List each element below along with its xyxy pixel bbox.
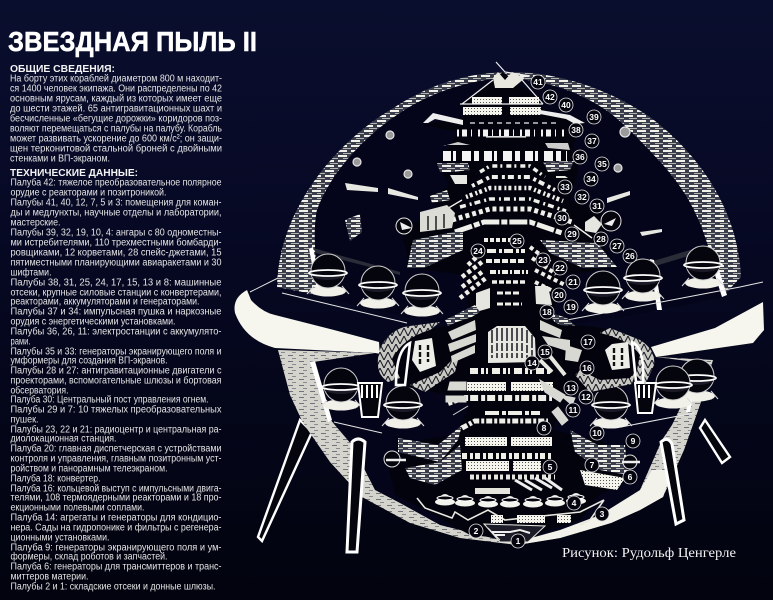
text block: general information [10, 64, 222, 164]
text block: technical data: ровщиками, 12 корветами, 28 спейс-джетами, 15 [10, 248, 222, 258]
numbered deck labels: 1 [516, 536, 521, 546]
numbered deck labels: 9 [631, 436, 636, 446]
hull inner rib left [310, 361, 332, 422]
side cluster right [585, 216, 602, 233]
text block: general information: стенками и ВП-экраном. [10, 154, 110, 164]
deck chevrons [440, 166, 592, 238]
text block: technical data: Палуба 18: конвертер. [10, 472, 100, 484]
icon: outer landing legs [258, 420, 730, 541]
text block: technical data: телями, 108 термоядерными реакторами и 18 про- [10, 492, 222, 504]
side details [345, 183, 662, 241]
central core: upper stack [396, 62, 625, 330]
numbered deck labels: 14 [527, 358, 537, 368]
text block: general information: может развивать ускорение до 600 км/с²; он защи- [10, 134, 222, 144]
text block: technical data: орудия с энергетическими установками. [10, 316, 176, 328]
text block: technical data: Палубы 38, 31, 25, 24, 17, 15, 13 и 8: машинные [10, 276, 222, 288]
small side pods [353, 127, 630, 178]
hangar panels [309, 245, 727, 310]
text block: technical data: ройством и панорамным телеэкраном. [10, 464, 168, 474]
text block: technical data: мастерские. [10, 218, 60, 228]
text block: technical data: Палубы 35 и 33: генераторы экранирующего поля и [10, 346, 222, 358]
hub lattice left [378, 322, 440, 382]
upper dome hull band [277, 72, 741, 287]
text block: technical data: Палуба 42: тяжелое преобразовательное полярное [10, 176, 222, 188]
text block: technical data: Палуба 6: генераторы для трансмиттеров и транс- [10, 560, 222, 572]
text block: technical data: Палуба 14: агрегаты и генераторы для кондицио- [10, 512, 222, 524]
text block: technical data: шифтами. [10, 266, 52, 278]
numbered deck labels: 26 [625, 251, 635, 261]
numbered deck labels: 11 [568, 405, 578, 415]
text block: general information: основным ярусам, каждый из которых имеет еще [10, 94, 222, 104]
numbered deck labels: 33 [560, 182, 570, 192]
text block: technical data: Палубы 41, 40, 12, 7, 5 и 3: помещения для коман- [10, 196, 222, 208]
text block: general information: ся 1400 человек экипажа. Они распределены по 42 [10, 84, 222, 94]
text block: general information: воляют перемещаться с палубы на палубу. Корабль [10, 122, 222, 134]
hub lattice right [600, 328, 654, 385]
numbered deck labels: 28 [596, 234, 606, 244]
numbered deck labels: 25 [512, 236, 522, 246]
numbered deck labels: 30 [557, 213, 567, 223]
numbered deck labels: 2 [474, 526, 479, 536]
icon: inner landing legs [347, 439, 684, 552]
numbered deck labels: 6 [628, 472, 633, 482]
central core: hub [378, 313, 654, 542]
hangar zigzag floor [417, 498, 604, 525]
numbered deck labels: 18 [542, 307, 552, 317]
text block: technical data: контроля и управления, главным позитронным уст- [10, 454, 222, 464]
numbered deck labels: 19 [566, 302, 576, 312]
roof [460, 62, 543, 104]
numbered deck labels: 32 [577, 192, 587, 202]
numbered deck labels: 3 [600, 509, 605, 519]
text block: technical data: ми истребителями, 110 трехместными бомбарди- [10, 236, 222, 248]
window rows [457, 130, 565, 136]
numbered deck labels: 37 [587, 136, 597, 146]
numbered deck labels: 23 [538, 255, 548, 265]
text block: technical data: ды и медлунхты, научные отделы и лаборатории, [10, 206, 222, 218]
hangar bay saucers [435, 493, 586, 508]
core body [400, 72, 625, 320]
text block: technical data: формеры, склад роботов и запчастей. [10, 550, 168, 562]
dome interior [315, 78, 722, 328]
numbered deck labels: 7 [590, 460, 595, 470]
heading: technical data: ТЕХНИЧЕСКИЕ ДАННЫЕ: [10, 168, 138, 179]
text block: technical data: Палубы 29 и 7: 10 тяжелых преобразовательных [10, 404, 222, 416]
text block: general information: до шести этажей. 65 антигравитационных шахт и [10, 104, 222, 114]
numbered deck labels: 4 [572, 498, 577, 508]
numbered deck labels: 41 [533, 77, 543, 87]
ring band left [234, 290, 381, 372]
numbered deck labels: 29 [567, 229, 577, 239]
text block: technical data: Палуба 30: Центральный пост управления огнем. [10, 394, 208, 406]
numbered deck labels: 5 [548, 462, 553, 472]
text block: technical data: Палуба 20: главная диспетчерская с устройствами [10, 442, 222, 454]
text block: technical data: Палубы 2 и 1: складские отсеки и донные шлюзы. [10, 580, 216, 592]
side steps [446, 380, 575, 425]
lower band of dome sides [277, 243, 741, 297]
central reactor organ [488, 326, 536, 363]
numbered deck labels: 42 [545, 92, 555, 102]
hub side decks [448, 320, 476, 363]
ring lines [250, 278, 763, 323]
bottom airlock [484, 524, 545, 542]
numbered deck labels: 20 [554, 290, 564, 300]
numbered deck labels: 21 [568, 277, 578, 287]
side blocks [437, 163, 470, 172]
lower hull interior [313, 353, 696, 541]
text block: technical data: екционными полевыми соплами. [10, 502, 144, 514]
text block: technical data: Палубы 23, 22 и 21: радиоцентр и центральная ра- [10, 424, 222, 436]
upper wings [423, 110, 585, 125]
reactor pods [412, 338, 436, 372]
numbered deck labels: 13 [566, 383, 576, 393]
numbered deck labels: 35 [597, 159, 607, 169]
lower wings [407, 230, 463, 268]
text block: technical data: Палуба 9: генераторы экранирующего поля и ум- [10, 542, 222, 554]
numbered deck labels: 16 [582, 363, 592, 373]
spheres [307, 246, 724, 428]
numbered deck labels: 40 [561, 100, 571, 110]
lower hangar diagonals [515, 478, 562, 490]
numbered deck labels: 24 [473, 246, 483, 256]
text block: technical data: Палубы 37 и 34: импульсная пушка и наркозные [10, 306, 222, 318]
text block: technical data: проекторами, вспомогательные шлюзы и бортовая [10, 374, 222, 386]
illustration credit: Рисунок: Рудольф Ценгерле [562, 546, 736, 561]
hub body [382, 313, 652, 540]
text block: technical data: рами. [10, 336, 30, 348]
text block: technical data [10, 168, 222, 592]
ship cross-section illustration [234, 62, 764, 552]
text block: technical data: пушек. [10, 414, 38, 426]
text block: technical data: нера. Сады на гидропонике и фильтры с регенера- [10, 522, 222, 534]
lower ring lines [334, 413, 694, 433]
numbered deck labels: 34 [586, 174, 596, 184]
text block: technical data: пятиместными планирующими авиаракетами и 30 [10, 258, 222, 268]
lower stack rows [460, 240, 565, 304]
lower wings [398, 425, 462, 462]
numbered deck labels: 15 [540, 347, 550, 357]
icon: cannon boxes [358, 383, 656, 417]
text block: technical data: реакторами, аккумуляторами и генераторами. [10, 296, 200, 308]
text block: technical data: Палубы 36, 26, 11: электростанции с аккумулято- [10, 326, 222, 338]
heading: general information: ОБЩИЕ СВЕДЕНИЯ: [10, 64, 115, 75]
numbered deck labels: 31 [592, 201, 602, 211]
ring band right [651, 302, 764, 357]
lower hull [278, 350, 713, 545]
text block: technical data: Палубы 28 и 27: антигравитационные двигатели с [10, 364, 222, 376]
text block: technical data: обсерватория. [10, 384, 68, 396]
numbered deck labels: 38 [571, 125, 581, 135]
text block: general information: щен терконитовой стальной броней с двойными [10, 142, 222, 154]
text block: technical data: миттеров материи. [10, 572, 88, 582]
numbered deck labels: 36 [575, 152, 585, 162]
numbered deck labels [469, 75, 640, 548]
numbered deck labels: 12 [581, 392, 591, 402]
numbered deck labels: 10 [592, 428, 602, 438]
text block: technical data: отсеки, крупные силовые станции с конвертерами, [10, 288, 222, 298]
text block: technical data: орудие с реакторами и позитроникой. [10, 188, 166, 198]
title: ЗВЕЗДНАЯ ПЫЛЬ II [8, 26, 257, 57]
text block: technical data: Палубы 39, 32, 19, 10, 4: ангары с 80 одноместны- [10, 226, 222, 238]
lattice connectors [410, 352, 636, 392]
numbered deck labels: 39 [589, 112, 599, 122]
side cluster left [420, 205, 455, 232]
text block: general information: На борту этих кораблей диаметром 800 м находит- [10, 72, 222, 84]
text block: technical data: умформеры для создания ВП-экранов. [10, 354, 168, 366]
numbered deck labels: 17 [583, 337, 593, 347]
text block: technical data: Палуба 16: кольцевой выступ с импульсными двига- [10, 482, 222, 494]
floor panels [491, 515, 503, 523]
text block: technical data: диолокационная станция. [10, 434, 116, 444]
text block: technical data: ционными установками. [10, 532, 110, 544]
numbered deck labels: 22 [555, 263, 565, 273]
text block: general information: бесчисленные «бегущие дорожки» коридоров поз- [10, 112, 222, 124]
numbered deck labels: 27 [612, 241, 622, 251]
hull inner rib right [686, 361, 700, 412]
numbered deck labels: 8 [542, 423, 547, 433]
lower deck rows [470, 368, 550, 374]
lower hull bright crescent right [517, 470, 672, 545]
